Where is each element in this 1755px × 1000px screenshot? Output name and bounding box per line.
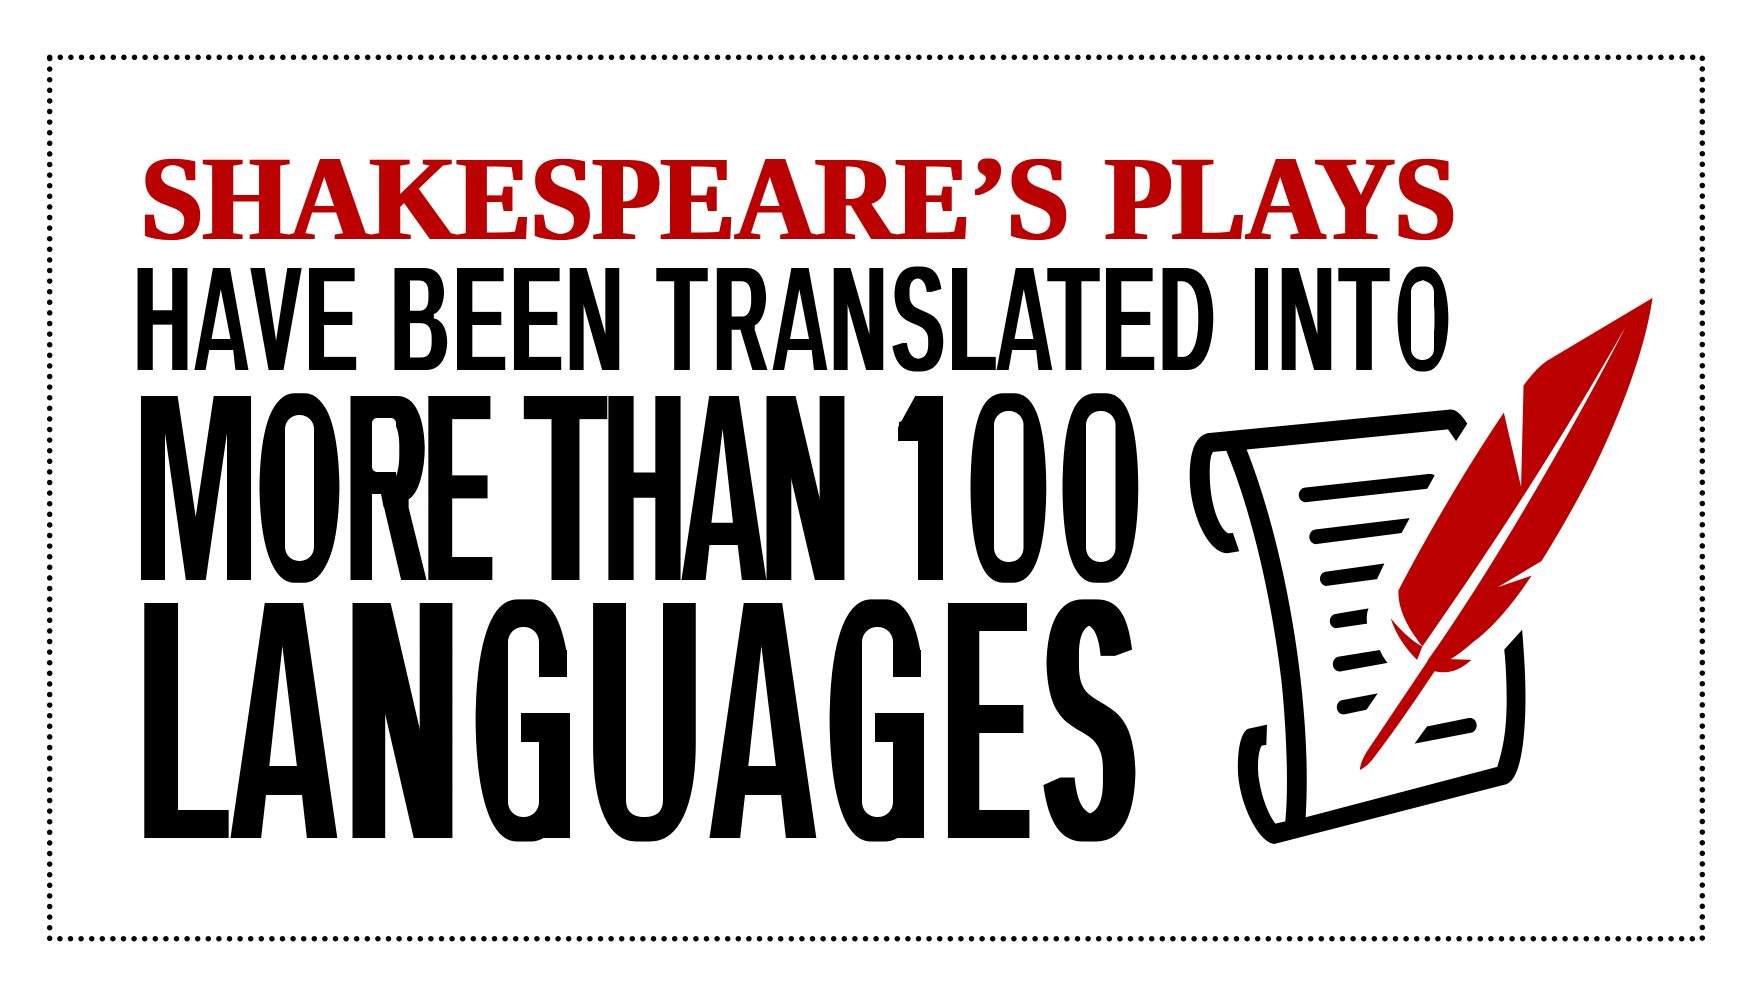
heading line: Shakespeare's Plays: SHAKESPEARE’S [141,133,1069,266]
heading line: more than 100: 0 [1062,332,1139,644]
heading line: more than 100: 1 [896,332,952,644]
heading line: more than 100 [136,331,1139,644]
heading line: more than 100: T [527,331,604,643]
heading line: have been translated into: B [391,233,449,405]
heading line: Shakespeare's Plays: PLAYS [1105,133,1456,266]
heading line: have been translated into: I [1253,232,1270,405]
heading line: have been translated into [134,232,1449,406]
heading line: have been translated into: E [1103,232,1155,405]
heading line: languages: U [591,521,698,921]
icon: scroll text lines [1299,474,1477,744]
heading line: have been translated into: A [996,232,1053,405]
heading line: have been translated into: N [567,233,622,405]
icon: scroll and quill [1190,298,1653,844]
heading line: more than 100: N [764,333,847,644]
heading line: have been translated into: N [831,233,886,405]
heading line: more than 100: H [606,331,683,644]
heading line: have been translated into: H [134,232,191,405]
heading line: languages: L [142,519,226,921]
heading line: have been translated into: A [194,233,249,405]
icon: paper scroll outline [1190,410,1525,844]
heading line: have been translated into: T [1339,234,1389,406]
heading line: have been translated into: D [1159,233,1215,405]
heading line: more than 100: 0 [970,332,1047,644]
heading line: have been translated into: E [511,233,562,405]
heading line: have been translated into: L [949,233,996,405]
heading line: languages: E [947,519,1027,920]
heading line: languages: G [478,519,570,921]
heading line: have been translated into: S [892,232,944,405]
heading line: more than 100: O [260,333,339,644]
heading line: languages: S [1045,520,1134,921]
heading line: have been translated into: E [454,232,506,405]
heading line: have been translated into: T [657,234,707,406]
heading line: have been translated into: A [772,233,828,405]
heading line: languages: G [832,519,924,921]
heading line: have been translated into: O [1397,233,1449,406]
heading line: languages: N [350,520,455,921]
heading line: languages: A [232,518,336,920]
heading line: more than 100: R [348,332,426,643]
heading line: have been translated into: V [251,232,301,405]
heading line: more than 100: M [136,331,256,643]
heading line: have been translated into: R [714,232,768,405]
heading line: languages: A [711,518,815,920]
heading line: have been translated into: N [1279,233,1334,405]
heading line: more than 100: A [682,333,766,644]
icon: red quill feather [1360,298,1653,770]
heading line: have been translated into: T [1048,234,1099,406]
heading line: languages [142,518,1134,921]
heading line: more than 100: E [427,333,491,644]
heading line: have been translated into: E [306,233,357,405]
